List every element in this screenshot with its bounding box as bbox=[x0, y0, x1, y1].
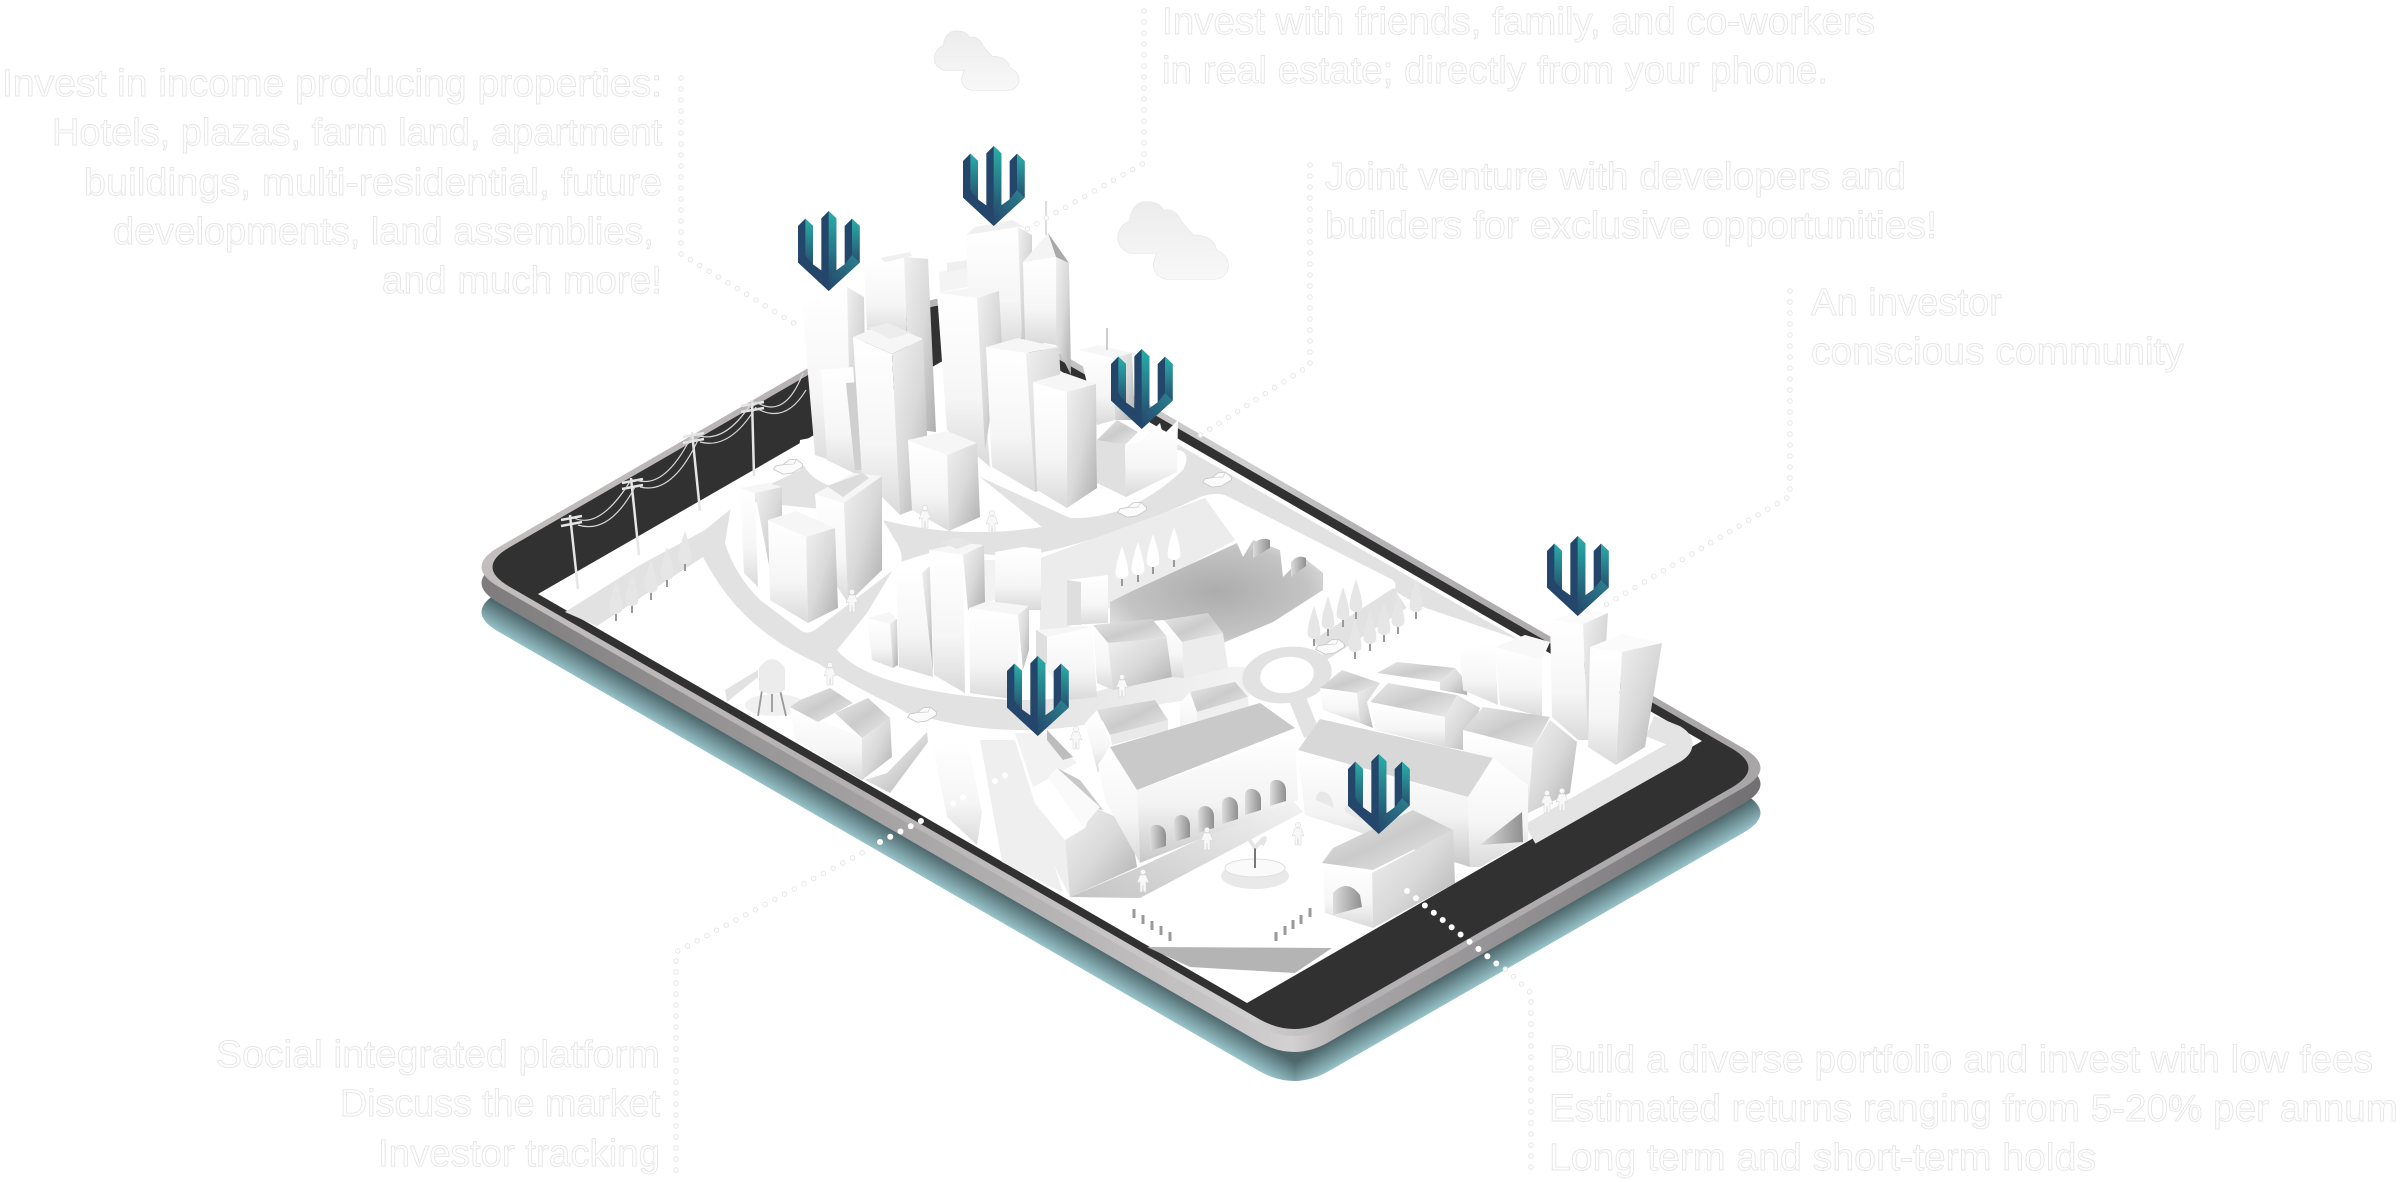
lower road bbox=[980, 740, 1063, 893]
tower: narrow with slit bbox=[821, 367, 862, 477]
cloud: small bbox=[934, 31, 1019, 90]
tower: pin one bbox=[802, 287, 866, 470]
car 4 bbox=[908, 707, 936, 722]
tower: mid right bbox=[986, 338, 1066, 492]
tower: tallest bbox=[966, 220, 1032, 350]
phone side bbox=[482, 314, 1760, 1052]
tall wedge building bbox=[933, 740, 982, 845]
text: social platform: Discuss the market bbox=[340, 1083, 660, 1125]
water tower base bbox=[745, 694, 805, 716]
text: social platform: Investor tracking bbox=[378, 1133, 660, 1175]
tower: block C tall bbox=[929, 537, 985, 693]
house: back wedge bbox=[1015, 730, 1077, 787]
trees: left row bbox=[610, 531, 691, 621]
water tower bbox=[725, 659, 786, 716]
pin 2 bbox=[963, 146, 1025, 226]
church hall with arcade bbox=[1098, 703, 1298, 863]
car 1 bbox=[774, 459, 802, 474]
phone dark bezel bbox=[492, 305, 1748, 1029]
tower: left back bbox=[740, 483, 782, 587]
tower: front short bbox=[908, 431, 980, 531]
person 10 bbox=[1541, 790, 1553, 813]
connector: social platform bbox=[676, 770, 1015, 1170]
wedge wall bbox=[865, 732, 928, 793]
person 3 bbox=[846, 589, 858, 612]
text: invest with friends bbox=[1162, 1, 1875, 92]
tower: block C right bbox=[1036, 626, 1097, 700]
corner road bbox=[1530, 726, 1682, 834]
pin 1 bbox=[798, 211, 860, 291]
ramp shading under hill bbox=[1040, 498, 1235, 640]
plot: central block and hill bbox=[837, 494, 1396, 700]
cars bbox=[774, 459, 1344, 722]
text: diverse portfolio: Long term and short-term holds bbox=[1549, 1137, 2096, 1179]
text: income producing properties: buildings, multi-residential, future bbox=[84, 162, 662, 204]
bridge arches bbox=[1253, 539, 1306, 577]
trees: white row bbox=[1116, 527, 1180, 586]
road network plateau bbox=[565, 420, 1220, 725]
house: far row bbox=[1377, 662, 1468, 695]
car 2 bbox=[1203, 472, 1231, 487]
tower: block C back bbox=[984, 547, 1041, 610]
person 1 bbox=[986, 510, 998, 533]
connector: diverse portfolio bbox=[1407, 891, 1531, 1167]
car 5 bbox=[1316, 639, 1344, 654]
house: left double roof bbox=[790, 688, 892, 780]
tower: left tall bbox=[815, 473, 882, 603]
people bbox=[824, 505, 1568, 892]
phone: teal ground shadow bbox=[482, 598, 1760, 1081]
trees bbox=[610, 527, 1422, 659]
pin 3 bbox=[1111, 349, 1173, 429]
pin 4 bbox=[1007, 656, 1069, 736]
text: investor community bbox=[1811, 282, 2184, 373]
house under pin five bbox=[1322, 810, 1455, 928]
text: income producing properties bbox=[2, 63, 662, 302]
pin 5 bbox=[1348, 754, 1410, 834]
church wall bbox=[1137, 733, 1298, 863]
tower: front right bbox=[1033, 373, 1097, 508]
location pins bbox=[798, 146, 1609, 834]
text: investor community: An investor bbox=[1811, 282, 2002, 324]
long gabled hall bbox=[1298, 719, 1528, 867]
person 5 bbox=[1116, 674, 1128, 697]
plot: upper tower block bbox=[800, 400, 1187, 532]
house: multi-gable left of church bbox=[1032, 768, 1137, 897]
tower: tall front bbox=[853, 323, 930, 515]
phone screen bbox=[538, 332, 1702, 1003]
house: small box by roundabout bbox=[1180, 682, 1250, 742]
car 3 bbox=[1118, 502, 1146, 517]
tower: right back small bbox=[1460, 643, 1498, 705]
text: diverse portfolio: Estimated returns ranging from 5-20% per annum bbox=[1549, 1088, 2398, 1130]
text: social platform bbox=[216, 1034, 660, 1175]
tower: block C mid bbox=[896, 566, 933, 677]
tower: behind pin three bbox=[1079, 328, 1135, 425]
text: joint venture: Joint venture with developers and bbox=[1325, 156, 1906, 198]
tower: pin six bbox=[1550, 610, 1608, 740]
text: investor community: conscious community bbox=[1811, 331, 2184, 373]
phone: body bbox=[482, 298, 1760, 1052]
road along upper bezel bbox=[1170, 440, 1520, 640]
house under pin three bbox=[1097, 420, 1178, 497]
bollards right bbox=[1276, 908, 1310, 941]
tower: left front bbox=[768, 511, 838, 623]
text: invest with friends: Invest with friends, family, and co-workers bbox=[1162, 1, 1875, 43]
text: income producing properties: developments, land assemblies, bbox=[113, 211, 654, 253]
tower: block C step bbox=[1067, 575, 1108, 625]
tower: back tall bbox=[864, 252, 936, 432]
hill depression bbox=[1110, 540, 1323, 643]
church roof bbox=[1110, 703, 1295, 790]
text: joint venture bbox=[1325, 156, 1937, 247]
tower: right middle bbox=[1495, 635, 1550, 717]
house: grey roof one bbox=[1093, 619, 1172, 690]
dotted connector lines bbox=[676, 11, 1790, 1170]
pole 2 bbox=[622, 478, 643, 555]
fountain bbox=[1221, 833, 1289, 889]
tower: block C front bbox=[969, 601, 1029, 700]
person 4 bbox=[824, 662, 836, 685]
house: row two bbox=[1370, 683, 1480, 750]
person 7 bbox=[1201, 827, 1213, 850]
text: diverse portfolio bbox=[1549, 1039, 2398, 1179]
text: social platform: Social integrated platform bbox=[216, 1034, 660, 1076]
connector: investor community bbox=[1602, 291, 1790, 607]
house: grey roof two bbox=[1164, 613, 1228, 678]
tower: top small bbox=[939, 260, 968, 292]
wires bbox=[574, 373, 806, 527]
utility poles bbox=[561, 373, 806, 589]
tower: right front bbox=[1588, 634, 1662, 765]
text: joint venture: builders for exclusive opportunities! bbox=[1325, 205, 1937, 247]
text: income producing properties: Hotels, plazas, farm land, apartment bbox=[52, 112, 662, 154]
house: cross roof bbox=[1320, 670, 1380, 728]
house: row three bbox=[1463, 707, 1577, 813]
text: income producing properties: Invest in income producing properties: bbox=[2, 63, 662, 105]
house: small north of church bbox=[1085, 700, 1168, 773]
pole 4 bbox=[741, 400, 764, 476]
roundabout bbox=[1239, 641, 1335, 709]
connector: friends and family bbox=[1020, 11, 1144, 233]
person 8 bbox=[1137, 869, 1149, 892]
connector: joint venture bbox=[1199, 165, 1310, 436]
pin 6 bbox=[1547, 536, 1609, 616]
person 9 bbox=[1292, 822, 1304, 845]
connector: income properties bbox=[681, 78, 800, 327]
plaza walkway bbox=[1070, 797, 1303, 898]
trees: grey rows bbox=[1308, 579, 1422, 659]
person 6 bbox=[1070, 726, 1082, 749]
person 11 bbox=[1556, 788, 1568, 811]
pole 1 bbox=[561, 515, 582, 589]
cloud: large bbox=[1118, 202, 1228, 279]
church arches bbox=[1150, 780, 1286, 851]
text: invest with friends: in real estate; directly from your phone. bbox=[1162, 50, 1828, 92]
tower: center bbox=[937, 287, 1002, 467]
text: diverse portfolio: Build a diverse portfolio and invest with low fees bbox=[1549, 1039, 2373, 1081]
curved main road bbox=[715, 545, 1250, 715]
bollards left bbox=[1134, 909, 1170, 941]
plaza bar bbox=[1147, 947, 1332, 973]
ground: roads and plots bbox=[565, 400, 1682, 973]
person 2 bbox=[919, 505, 931, 528]
road to trees bbox=[1320, 598, 1400, 650]
buildings bbox=[725, 201, 1662, 941]
text: income producing properties: and much more! bbox=[382, 260, 662, 302]
pole 3 bbox=[683, 432, 704, 511]
road from roundabout bbox=[1298, 700, 1312, 735]
tower: spire bbox=[1023, 201, 1071, 375]
tower: block C narrow bbox=[867, 612, 898, 668]
church gable bbox=[1098, 747, 1140, 863]
plot: left tower block bbox=[725, 500, 902, 632]
phone silver rim bbox=[482, 298, 1760, 1036]
